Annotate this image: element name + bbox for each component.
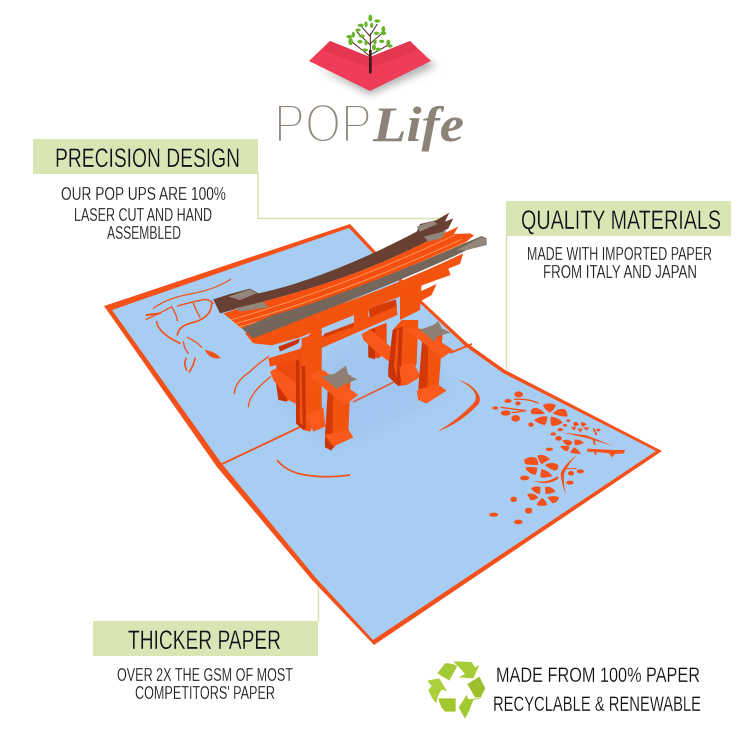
roof band: brown top: [213, 213, 453, 313]
main left pillar: [296, 320, 322, 432]
callout: thicker paper: [93, 621, 318, 703]
connector lines: [258, 172, 506, 622]
cut-out: waves beside gate: [234, 357, 271, 407]
blossom upper: [531, 403, 568, 426]
blossom small: [550, 419, 600, 441]
left side upper plate: [308, 370, 358, 405]
description: [527, 244, 712, 282]
torii legs: [270, 320, 453, 451]
torii upper structure: [213, 213, 487, 367]
description: COMPETITORS' PAPER: [135, 683, 275, 703]
blossom lower: [527, 486, 559, 506]
torii gate: [213, 213, 487, 451]
right pillar cap: [419, 321, 451, 342]
heading bar: [93, 621, 318, 656]
cut-out: cherry blossoms: [437, 380, 625, 524]
left pillar cap: [322, 366, 357, 389]
logo: tree: [346, 15, 393, 73]
heading bar: [33, 139, 258, 174]
cut-out: bird: [146, 279, 231, 372]
blossom middle: [560, 439, 584, 454]
description: OVER 2X THE GSM OF MOST: [117, 665, 293, 685]
main right pillar: [388, 320, 421, 386]
description: LASER CUT AND HAND: [74, 205, 212, 225]
logo: red open book: [309, 41, 436, 95]
outer left pillar: [325, 375, 353, 451]
description: ASSEMBLED: [107, 223, 181, 243]
torii cast shadow: [280, 340, 450, 450]
callout: quality materials: [506, 201, 731, 282]
icon: recycle arrows: [427, 661, 485, 719]
heading bar: [506, 201, 731, 236]
back left pillar: [270, 352, 298, 405]
left tie beam: [268, 348, 303, 367]
main left lower plate: [306, 407, 325, 432]
description: [117, 665, 293, 703]
roof end caps: [228, 221, 487, 312]
outer right pillar: [403, 328, 453, 403]
logo wordmark: Life: Life: [372, 96, 464, 152]
cut-out: wave lower left: [277, 460, 350, 477]
card base: orange edge and blue paper: [104, 224, 662, 645]
nuki crossbar: [321, 299, 397, 348]
recycling text: [493, 664, 701, 716]
left bracket: [278, 338, 300, 352]
window behind crossbar: [321, 297, 400, 343]
shimagi lintel: [245, 253, 463, 345]
card fold lines: [220, 344, 472, 465]
logo wordmark: POP: POP: [274, 92, 372, 154]
heading: THICKER PAPER: [128, 625, 281, 655]
logo: Pop Life: [274, 15, 464, 154]
description: [61, 184, 226, 243]
description: OUR POP UPS ARE 100%: [61, 184, 226, 204]
pop-up card: [104, 213, 662, 645]
callout: precision design: [33, 139, 258, 243]
blossom large: [524, 455, 558, 478]
back right pillar: [362, 323, 393, 363]
roof band: grey lower: [242, 236, 487, 338]
right tie beam: [420, 284, 437, 302]
roof band: orange slats: [223, 227, 474, 328]
heading: PRECISION DESIGN: [55, 143, 240, 173]
recycling note: [427, 661, 701, 719]
main pillar tops: [302, 283, 422, 367]
